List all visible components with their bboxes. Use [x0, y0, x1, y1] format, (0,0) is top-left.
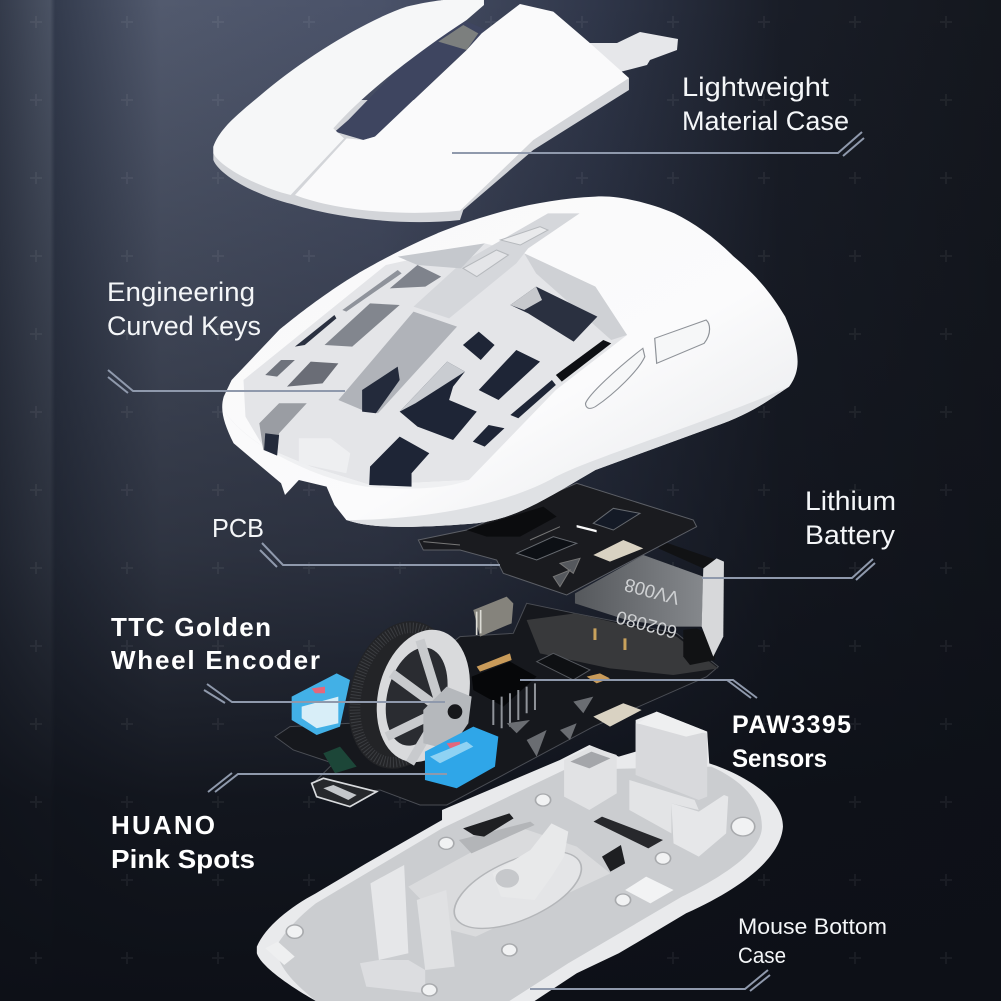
left tower — [564, 747, 617, 810]
wheel opening — [376, 641, 457, 752]
encoder — [423, 687, 472, 750]
outer body — [222, 196, 798, 527]
block base — [629, 780, 699, 833]
panel: lithium battery: 602080 — [614, 607, 679, 643]
sensor cutout — [593, 508, 640, 530]
rim lower shade — [224, 410, 469, 489]
spokes — [387, 640, 442, 763]
callout: lightweight material case: Lightweight — [682, 72, 830, 102]
front bumper — [299, 438, 350, 473]
black slide switch pad — [459, 822, 535, 853]
panel: scroll wheel with encoder — [333, 610, 483, 780]
tire ribs — [341, 618, 462, 772]
open frame — [243, 243, 627, 485]
callout: PAW3395 sensors: PAW3395 — [732, 711, 851, 739]
side button front — [586, 348, 645, 408]
callout: HUANO pink spots — [111, 773, 447, 874]
front clip — [265, 942, 295, 965]
lower body shade — [346, 387, 789, 527]
sensor chip — [472, 662, 537, 707]
tire — [333, 610, 470, 780]
solder pads — [423, 527, 580, 587]
callout: mouse bottom case: Mouse Bottom — [738, 914, 887, 939]
callout: engineering curved keys — [107, 277, 345, 393]
grey right inner wall — [524, 253, 627, 340]
callout: engineering curved keys: Curved Keys — [107, 311, 261, 341]
tall battery block — [636, 723, 707, 800]
frame holes — [259, 265, 611, 487]
screw posts — [286, 794, 755, 996]
gold battery pins — [595, 628, 625, 650]
panel: upper PCB — [418, 483, 697, 595]
green board patch — [323, 747, 357, 773]
panel: mouse bottom case — [257, 712, 783, 1001]
second key — [463, 250, 508, 277]
battery printed text: VV008 — [622, 574, 682, 609]
callout: lightweight material case — [452, 72, 864, 156]
callout: TTC golden wheel encoder — [111, 612, 445, 703]
panel: left blue microswitch — [292, 673, 350, 735]
callout: PCB: PCB — [212, 513, 264, 543]
side button rear — [655, 320, 710, 363]
battery tray zone — [527, 613, 718, 675]
callout: TTC golden wheel encoder: TTC Golden — [111, 612, 271, 642]
black hook — [602, 845, 625, 872]
outer rim — [257, 712, 783, 1001]
centre ring — [438, 836, 597, 944]
solder detail — [507, 697, 593, 757]
white connector — [593, 703, 642, 727]
panel: lithium battery — [575, 542, 724, 657]
callout: PAW3395 sensors: Sensors — [732, 745, 827, 773]
callout: lithium battery: Battery — [805, 520, 896, 550]
battery right end — [702, 558, 724, 657]
white connector — [593, 540, 643, 562]
right tower — [671, 795, 728, 857]
white button — [625, 877, 674, 903]
rear tab — [588, 32, 678, 100]
white strip — [577, 525, 597, 532]
board switch block — [467, 507, 557, 537]
panel: right blue microswitch — [425, 727, 498, 788]
callout: engineering curved keys: Engineering — [107, 277, 255, 307]
inner floor — [276, 767, 762, 1001]
callout: HUANO pink spots: Pink Spots — [111, 844, 255, 874]
callout: PAW3395 sensors — [520, 680, 851, 773]
block top face — [638, 712, 707, 737]
grey button strip — [414, 213, 580, 318]
sensor window — [537, 653, 590, 680]
callout: mouse bottom case — [530, 914, 887, 991]
black rectangle — [594, 817, 663, 848]
usb-c port — [312, 778, 377, 807]
right half of case — [295, 4, 629, 213]
black connector — [683, 628, 715, 665]
panel: top lightweight case — [213, 0, 678, 222]
gold contacts — [477, 653, 610, 683]
long wall — [408, 827, 610, 937]
callout: mouse bottom case: Case — [738, 943, 786, 968]
callout: lithium battery — [702, 486, 896, 580]
upper left inner wall — [398, 243, 485, 268]
slot background and grey interior — [335, 20, 487, 140]
left columns — [370, 865, 408, 960]
callout: PCB — [212, 513, 500, 567]
top key — [501, 227, 548, 245]
callout: HUANO pink spots: HUANO — [111, 810, 215, 840]
raised arm — [493, 823, 568, 900]
panel: main board — [275, 597, 718, 807]
callout: lightweight material case: Material Case — [682, 106, 849, 136]
rim — [363, 620, 483, 772]
callout: TTC golden wheel encoder: Wheel Encoder — [111, 645, 320, 675]
case side thickness — [213, 78, 629, 222]
sensor pins — [493, 683, 535, 728]
vertical encoder socket — [473, 597, 513, 637]
window outline — [517, 537, 577, 560]
panel: engineering curved keys shell — [222, 196, 798, 527]
callout: lithium battery: Lithium — [805, 486, 896, 516]
left half of case — [213, 0, 484, 195]
